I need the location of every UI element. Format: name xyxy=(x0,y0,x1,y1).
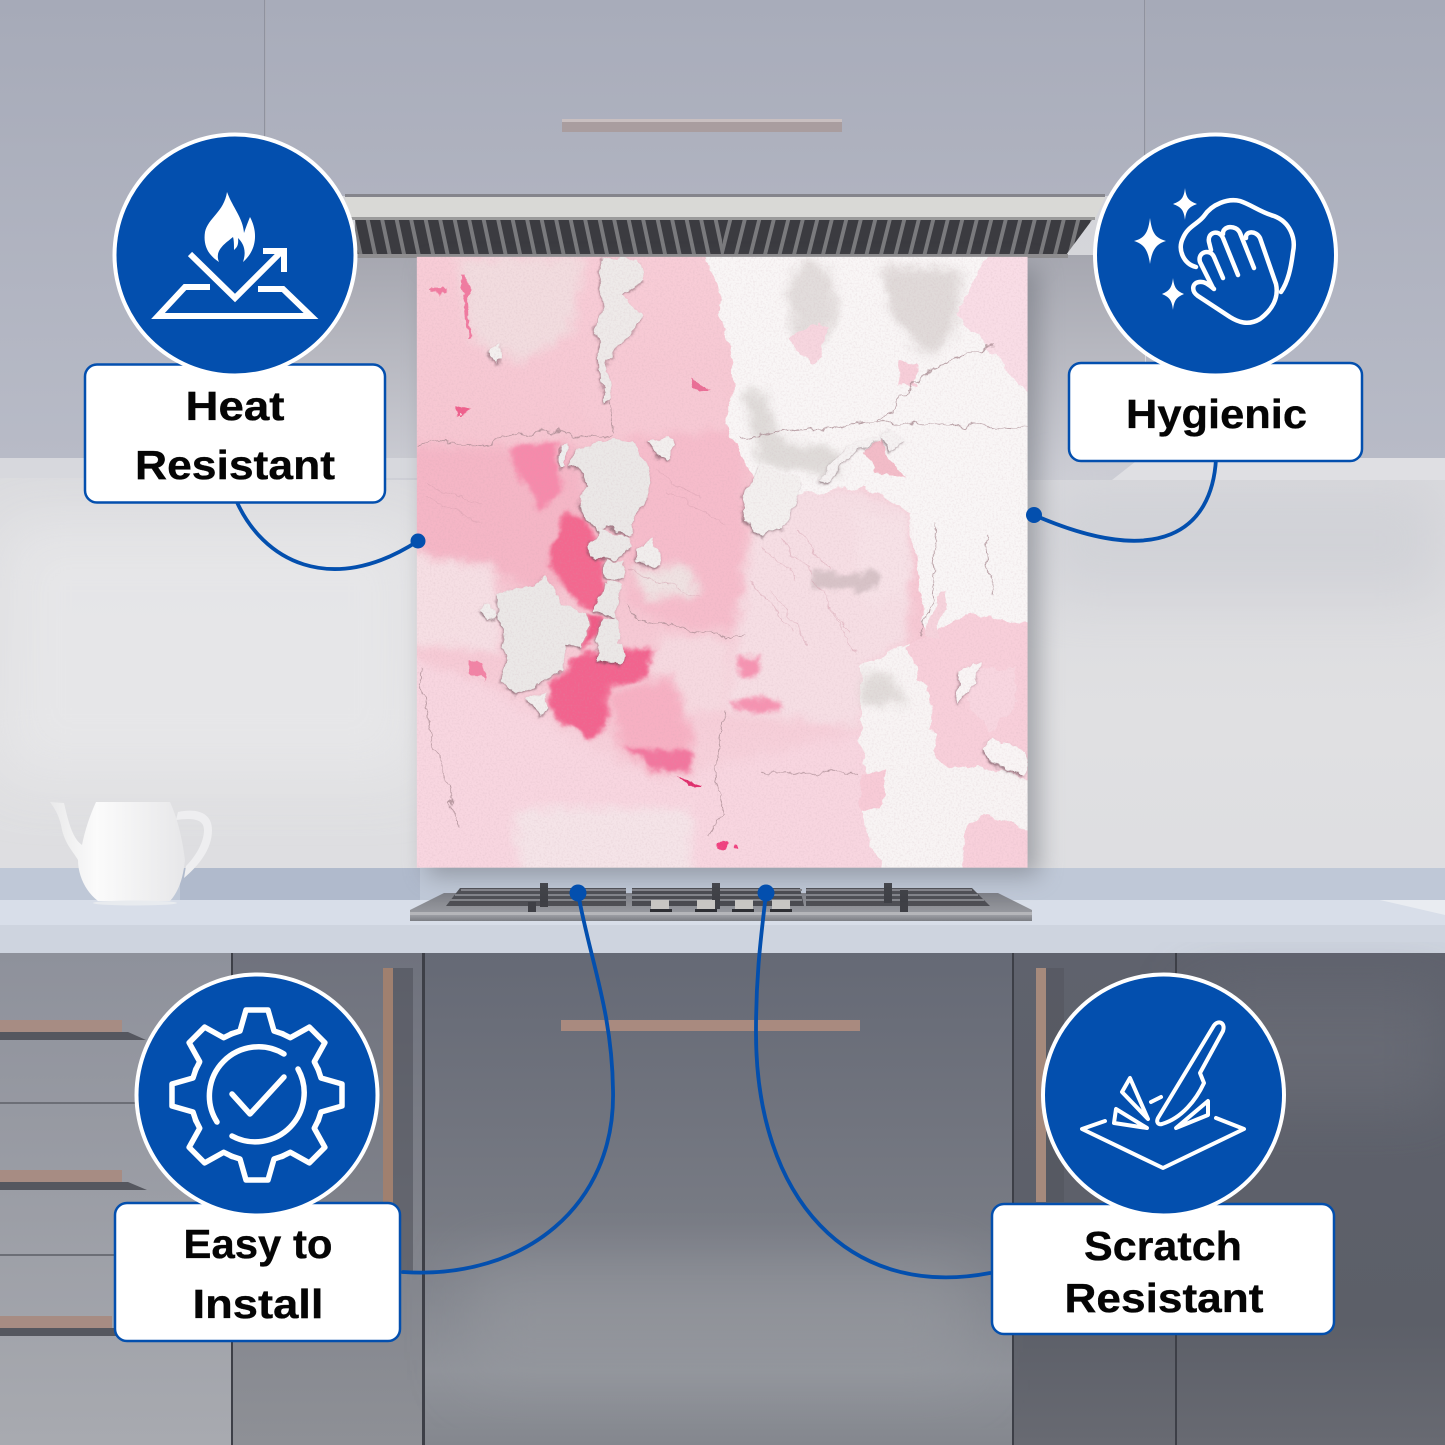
heading: heat resistant: Resistant xyxy=(135,442,335,488)
label box: scratch resistant xyxy=(992,972,1334,1334)
connector: easy to install xyxy=(403,884,613,1273)
heading: scratch resistant: Resistant xyxy=(1064,1275,1264,1321)
diagonal brush texture xyxy=(426,471,856,652)
label box: hygienic xyxy=(1069,132,1362,461)
badge: scratch resistant xyxy=(1041,972,1286,1218)
vertical white strip top xyxy=(597,258,643,401)
label box: heat resistant xyxy=(85,132,385,502)
wall under hood xyxy=(265,255,1145,480)
central flakes xyxy=(571,439,651,535)
connector: hygienic xyxy=(1026,459,1216,541)
connector: heat resistant xyxy=(236,500,426,569)
stippled pale patch top left xyxy=(458,258,583,363)
pale pink veil in the white centre xyxy=(852,511,908,604)
cabinet handle top xyxy=(562,119,842,132)
icon: flame over surface xyxy=(158,192,311,316)
badge: easy to install xyxy=(134,972,380,1218)
pale lower left xyxy=(416,548,502,654)
pink patches right xyxy=(956,257,1028,392)
teapot xyxy=(50,802,212,906)
icon: gear with check xyxy=(172,1010,342,1180)
badge: heat resistant xyxy=(112,132,358,378)
white paint main body xyxy=(706,256,1028,630)
upper cabinet left xyxy=(0,0,265,458)
connector: scratch resistant xyxy=(756,884,990,1277)
label box: easy to install xyxy=(115,972,400,1341)
upper cabinet centre xyxy=(266,0,1145,196)
heading: heat resistant: Heat xyxy=(186,383,285,429)
splashback panel: peeling pink paint xyxy=(416,256,1028,868)
gas hob xyxy=(410,883,1032,921)
panel shadow xyxy=(427,268,1039,876)
paint grain xyxy=(417,257,1028,868)
heading: easy to install: Easy to xyxy=(184,1221,332,1267)
heading: scratch resistant: Scratch xyxy=(1084,1223,1242,1269)
hot pink marks xyxy=(510,441,563,511)
white lower right xyxy=(858,644,1028,868)
badge: hygienic xyxy=(1093,132,1338,378)
icon: hand wiping with sparkles xyxy=(1134,188,1294,323)
lower cabinets xyxy=(0,953,1445,1445)
cracks xyxy=(417,343,1028,837)
heading: easy to install: Install xyxy=(192,1281,324,1327)
grey worn patches xyxy=(788,258,836,346)
pale striated middle xyxy=(727,487,912,728)
upper cabinet right xyxy=(1146,0,1445,458)
icon: knife scratching surface xyxy=(1082,1022,1244,1168)
heading: hygienic: Hygienic xyxy=(1126,391,1307,437)
countertop xyxy=(0,868,1445,953)
saturated left middle xyxy=(417,442,582,590)
extractor hood xyxy=(345,194,1105,258)
